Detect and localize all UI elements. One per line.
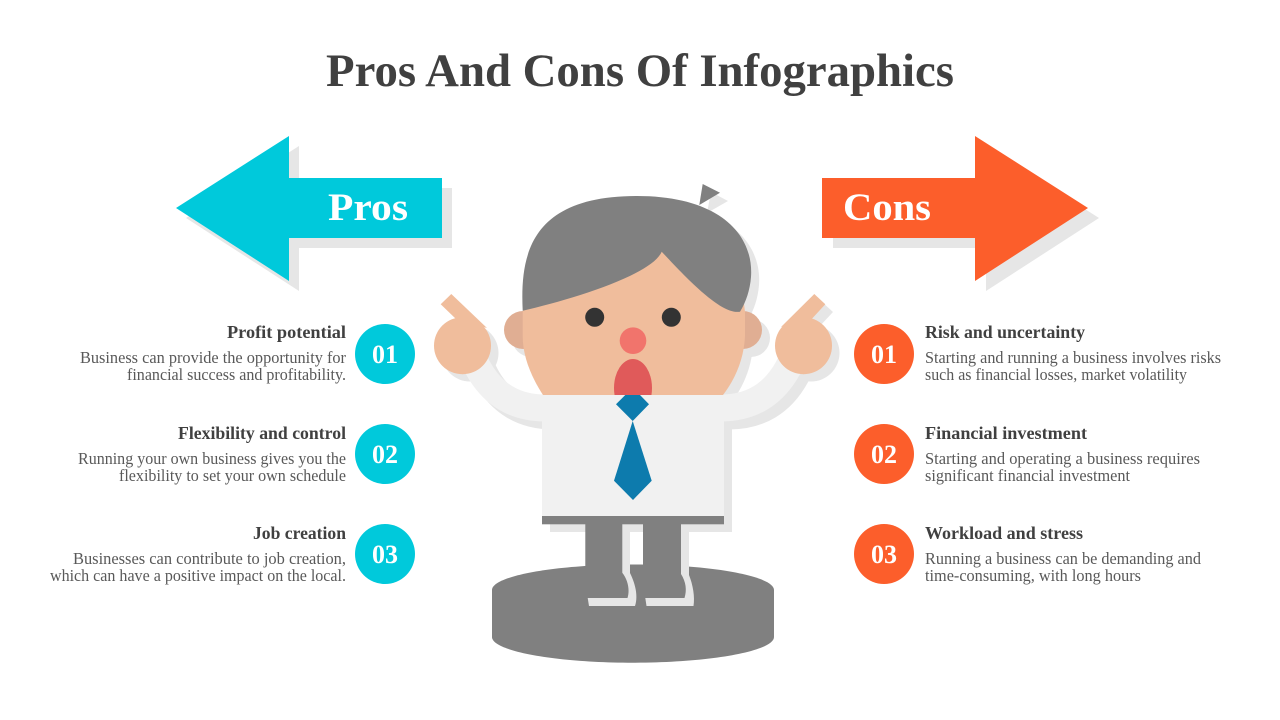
cons item 3: Workload and stress bbox=[925, 523, 1083, 543]
shirt bbox=[542, 395, 724, 516]
legs bbox=[585, 524, 681, 598]
pros item 2: Running your own business gives you the bbox=[78, 449, 346, 468]
character shadow bbox=[442, 192, 840, 573]
pros item 1: 01 bbox=[372, 340, 398, 369]
tie bbox=[614, 395, 652, 500]
pros item 1: Profit potential bbox=[227, 322, 346, 342]
platform bbox=[492, 564, 774, 663]
pros item 3: Job creation bbox=[253, 523, 346, 543]
hair tuft bbox=[699, 184, 720, 205]
pros item 2: flexibility to set your own schedule bbox=[119, 466, 346, 485]
mouth bbox=[614, 359, 652, 395]
cons item 1 bbox=[854, 322, 1221, 384]
cons item 1: Risk and uncertainty bbox=[925, 322, 1085, 342]
pros item 3 bbox=[50, 523, 415, 585]
cons item 1: such as financial losses, market volatility bbox=[925, 365, 1188, 384]
belt bbox=[542, 516, 724, 524]
nose bbox=[620, 327, 646, 354]
cons item 3: 03 bbox=[871, 540, 897, 569]
shoes bbox=[588, 565, 694, 606]
character bbox=[434, 184, 840, 606]
cons item 2 bbox=[854, 423, 1200, 485]
pros item 3: 03 bbox=[372, 540, 398, 569]
arrow: cons bbox=[822, 136, 1099, 291]
pros item 2: Flexibility and control bbox=[178, 423, 346, 443]
cons item 2: significant financial investment bbox=[925, 466, 1130, 485]
cons item 1: Starting and running a business involves risks bbox=[925, 348, 1221, 367]
pros item 2: 02 bbox=[372, 440, 398, 469]
cons item 3 bbox=[854, 523, 1202, 585]
cons item 2: 02 bbox=[871, 440, 897, 469]
cons item 3: Running a business can be demanding and bbox=[925, 549, 1202, 568]
arrow: pros: Pros bbox=[328, 186, 408, 229]
pros item 2 bbox=[78, 423, 415, 485]
cons item 1: 01 bbox=[871, 340, 897, 369]
cons item 3: time-consuming, with long hours bbox=[925, 566, 1141, 585]
arms bbox=[470, 352, 796, 408]
cons item 2: Starting and operating a business requires bbox=[925, 449, 1200, 468]
hands bbox=[434, 294, 832, 374]
ears bbox=[504, 311, 762, 349]
eyes bbox=[585, 308, 681, 327]
arrow: pros bbox=[176, 136, 452, 291]
pros item 3: Businesses can contribute to job creation, bbox=[73, 549, 346, 568]
cons item 2: Financial investment bbox=[925, 423, 1087, 443]
pros item 1: financial success and profitability. bbox=[127, 365, 346, 384]
pros item 1 bbox=[80, 322, 415, 384]
pros item 3: which can have a positive impact on the local. bbox=[50, 566, 346, 585]
face bbox=[523, 240, 745, 395]
hair bbox=[522, 196, 751, 312]
pros item 1: Business can provide the opportunity for bbox=[80, 348, 346, 367]
arrow: cons: Cons bbox=[843, 186, 931, 229]
title: Pros And Cons Of Infographics bbox=[326, 45, 954, 97]
